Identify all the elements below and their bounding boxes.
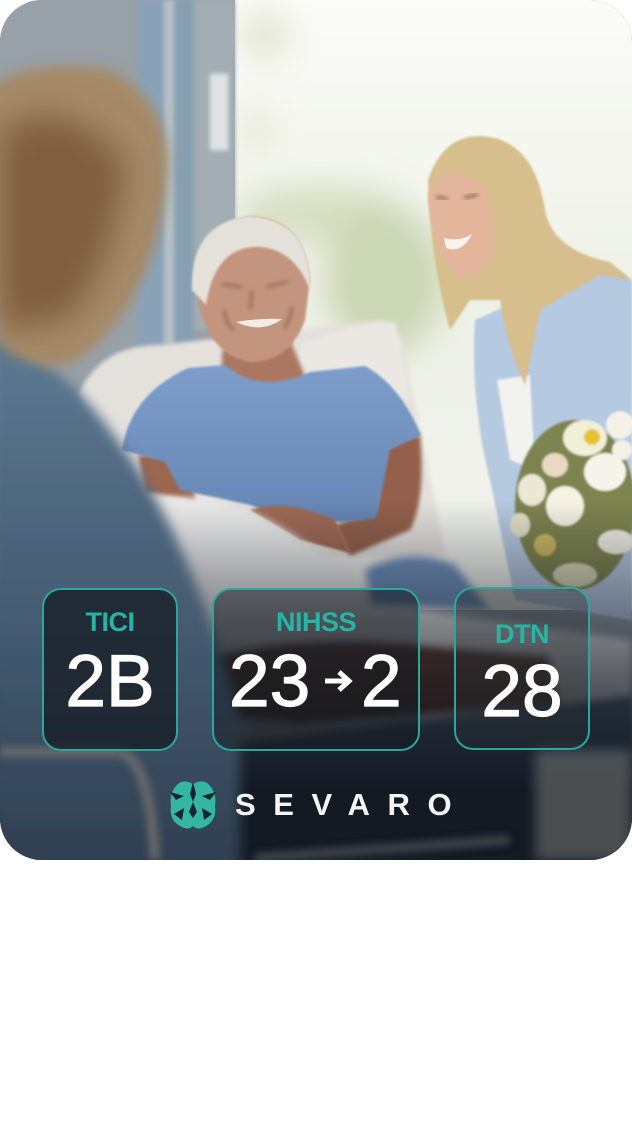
smile	[236, 319, 282, 327]
bed headrest and pillow	[78, 320, 446, 560]
label: TICI: TICI	[86, 607, 134, 637]
icon: teal brain	[170, 781, 216, 828]
stat box: NIHSS	[212, 588, 420, 751]
flowers	[510, 411, 632, 590]
head	[195, 216, 310, 362]
logo: Sevaro	[170, 781, 469, 828]
value: 28: 28	[481, 651, 563, 732]
label: DTN: DTN	[495, 619, 549, 649]
value: 2B: 2B	[65, 641, 155, 722]
bedding	[150, 498, 632, 860]
neck	[222, 340, 306, 395]
woman	[428, 136, 632, 620]
wordmark: SEVARO	[235, 787, 469, 822]
face	[428, 173, 494, 276]
patient	[122, 216, 422, 556]
label: NIHSS: NIHSS	[276, 607, 356, 637]
shirt	[122, 365, 421, 522]
coat	[474, 262, 632, 620]
value before: 23: 23	[229, 641, 310, 722]
photo: hospital room with patient, nurse and visitor	[0, 0, 632, 860]
stat box: TICI	[42, 588, 178, 751]
icon: arrow	[325, 670, 353, 692]
stat box: DTN	[454, 587, 590, 750]
dark gradient	[0, 0, 632, 860]
hair	[428, 136, 632, 385]
bed rail	[0, 752, 510, 860]
value after: 2: 2	[361, 641, 402, 722]
window frame	[138, 0, 235, 345]
foreground visitor	[0, 66, 240, 870]
arms	[138, 455, 195, 500]
value: 23 to 2	[229, 641, 402, 722]
wall and window	[0, 0, 632, 860]
hero photo card	[0, 0, 632, 860]
